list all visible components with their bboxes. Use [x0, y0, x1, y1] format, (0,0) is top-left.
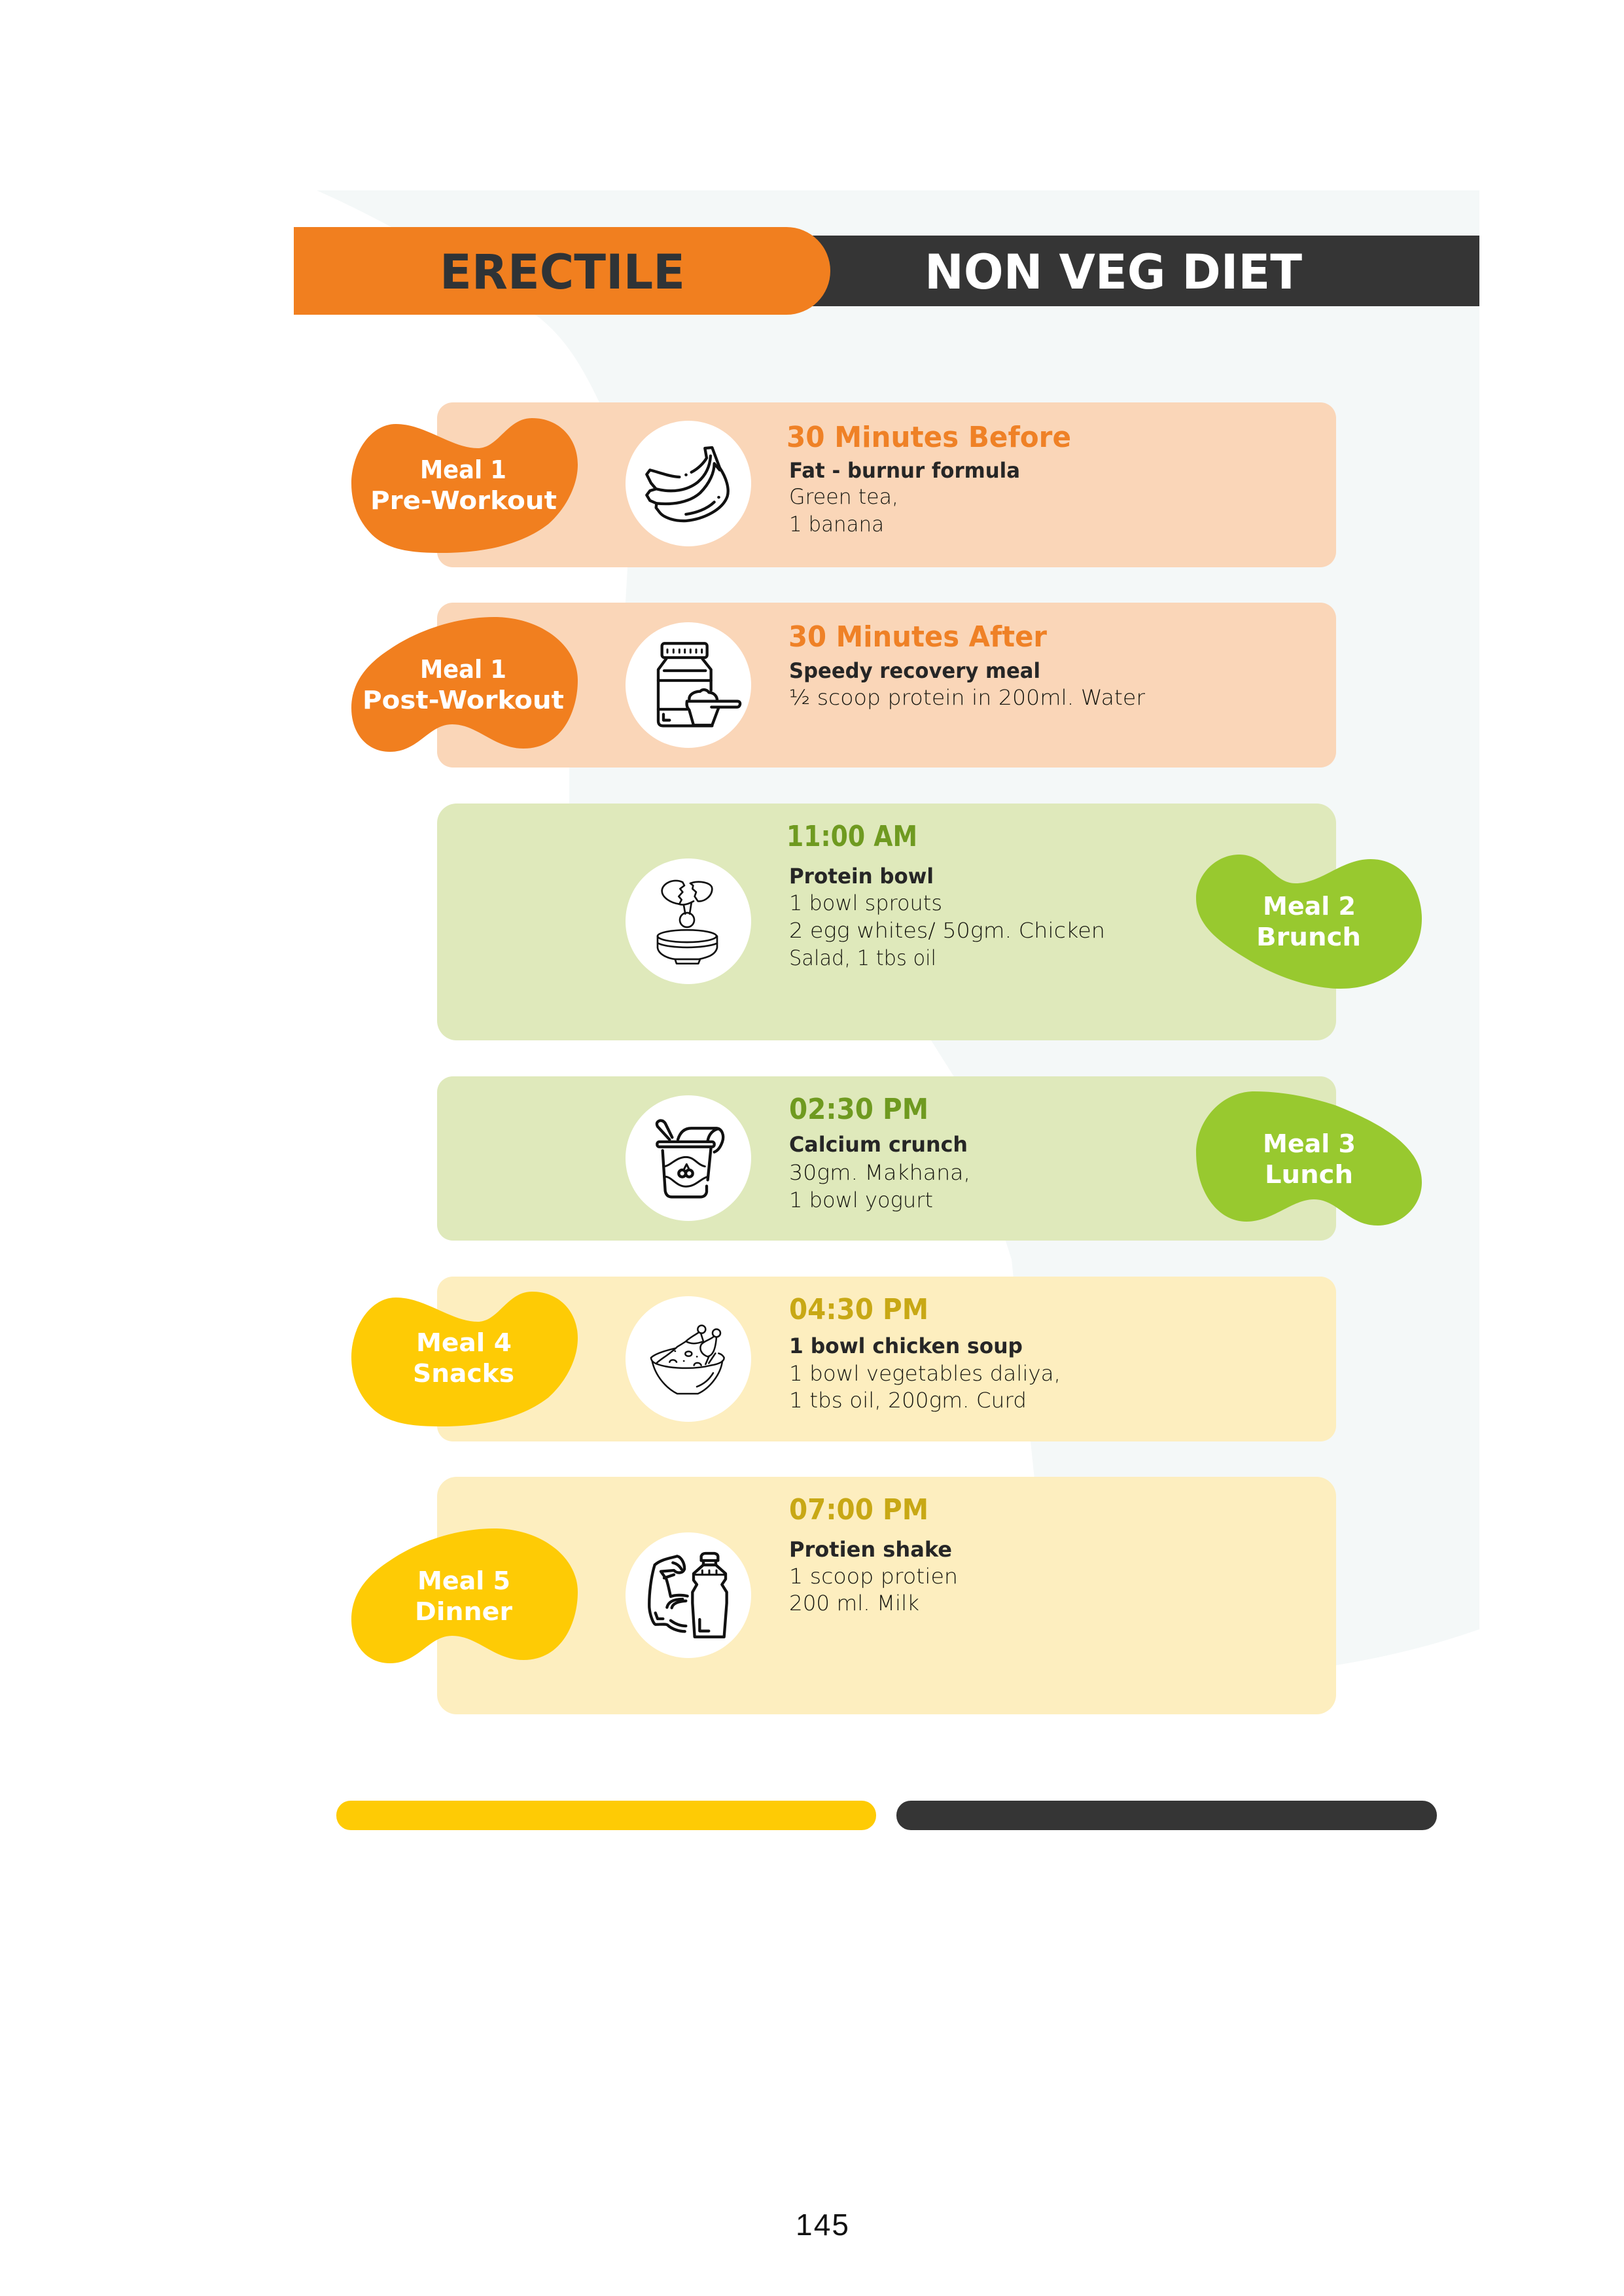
- panel: meal 1 post-workout: [351, 603, 1336, 768]
- card text: 30 minutes before: Green tea,: [789, 484, 898, 509]
- card text: 02:30 pm: 30gm. Makhana,: [789, 1160, 970, 1185]
- card text: 30 minutes after: 30 Minutes After: [788, 620, 1047, 654]
- card text: 11:00 am: 1 bowl sprouts: [789, 891, 942, 915]
- panel: meal 2 brunch: [437, 804, 1422, 1040]
- footer bar: yellow: [336, 1801, 876, 1830]
- icon: bananas: [646, 448, 728, 521]
- card text: 30 minutes before: 1 banana: [789, 512, 884, 537]
- card text: 30 minutes after: ½ scoop protein in 200ml. Water: [789, 685, 1146, 710]
- blob label: meal 4 snacks: Meal 4: [416, 1328, 512, 1357]
- card text: 30 minutes after: [788, 620, 1146, 710]
- header bar: non veg diet: [772, 236, 1479, 306]
- blob label: meal 1 pre-workout: Pre-Workout: [370, 486, 557, 515]
- blob label: meal 4 snacks: [351, 1292, 578, 1426]
- card text: 04:30 pm: [789, 1293, 1061, 1413]
- card text: 07:00 pm: Protien shake: [789, 1537, 952, 1562]
- heading: non veg diet: NON VEG DIET: [925, 245, 1302, 300]
- blob label: meal 1 pre-workout: [351, 418, 578, 553]
- background pale curved shape: [317, 190, 1479, 1665]
- blob label: meal 2 brunch: Brunch: [1256, 923, 1361, 951]
- blob label: meal 1 post-workout: Post-Workout: [362, 686, 564, 715]
- card text: 11:00 am: 11:00 AM: [786, 820, 917, 853]
- blob label: meal 5 dinner: Dinner: [415, 1597, 512, 1626]
- icon: flexed arm and bottle: [649, 1553, 727, 1637]
- blob label: meal 2 brunch: Meal 2: [1263, 892, 1356, 921]
- header pill: erectile: [294, 227, 830, 315]
- card text: 04:30 pm: 04:30 PM: [789, 1293, 928, 1326]
- blob label: meal 3 lunch: Meal 3: [1263, 1129, 1356, 1158]
- card text: 30 minutes after: Speedy recovery meal: [789, 658, 1040, 683]
- card text: 30 minutes before: [786, 421, 1071, 537]
- card text: 07:00 pm: 1 scoop protien: [789, 1564, 958, 1589]
- blob label: meal 4 snacks: Snacks: [413, 1359, 514, 1388]
- panel: meal 1 pre-workout: [351, 402, 1336, 567]
- card text: 11:00 am: [786, 820, 1105, 970]
- blob label: meal 2 brunch: [1196, 855, 1422, 989]
- card text: 11:00 am: Salad, 1 tbs oil: [789, 945, 936, 970]
- card text: 11:00 am: Protein bowl: [789, 864, 934, 889]
- panel: meal 5 dinner: [351, 1477, 1336, 1714]
- card text: 02:30 pm: Calcium crunch: [789, 1132, 968, 1157]
- blob label: meal 5 dinner: Meal 5: [417, 1566, 510, 1595]
- card text: 02:30 pm: 1 bowl yogurt: [789, 1188, 933, 1212]
- page number: 145: [796, 2208, 849, 2242]
- card text: 07:00 pm: 07:00 PM: [789, 1493, 928, 1527]
- card text: 11:00 am: 2 egg whites/ 50gm. Chicken: [789, 918, 1105, 943]
- icon: yogurt cup: [657, 1121, 723, 1197]
- footer bar: dark: [896, 1801, 1437, 1830]
- panel: meal 3 lunch: [437, 1076, 1422, 1241]
- icon: chicken soup bowl: [651, 1326, 724, 1394]
- blob label: meal 1 post-workout: Meal 1: [420, 655, 506, 684]
- card text: 04:30 pm: 1 bowl vegetables daliya,: [789, 1361, 1061, 1386]
- card text: 30 minutes before: 30 Minutes Before: [786, 421, 1071, 454]
- panel: meal 4 snacks: [351, 1277, 1336, 1441]
- blob label: meal 3 lunch: Lunch: [1265, 1160, 1353, 1189]
- heading: erectile: ERECTILE: [440, 245, 685, 300]
- icon: protein jar and scoop: [658, 643, 740, 726]
- card text: 07:00 pm: 200 ml. Milk: [789, 1591, 919, 1616]
- card text: 04:30 pm: 1 tbs oil, 200gm. Curd: [789, 1388, 1027, 1413]
- icon: cracked egg and bowl: [658, 881, 717, 964]
- card text: 04:30 pm: 1 bowl chicken soup: [789, 1333, 1023, 1358]
- card text: 30 minutes before: Fat - burnur formula: [789, 458, 1020, 483]
- card text: 02:30 pm: 02:30 PM: [789, 1093, 928, 1126]
- blob label: meal 5 dinner: [351, 1528, 578, 1663]
- blob label: meal 3 lunch: [1196, 1091, 1422, 1226]
- blob label: meal 1 pre-workout: Meal 1: [420, 455, 506, 484]
- card text: 07:00 pm: [789, 1493, 958, 1616]
- blob label: meal 1 post-workout: [351, 617, 578, 752]
- card text: 02:30 pm: [789, 1093, 970, 1212]
